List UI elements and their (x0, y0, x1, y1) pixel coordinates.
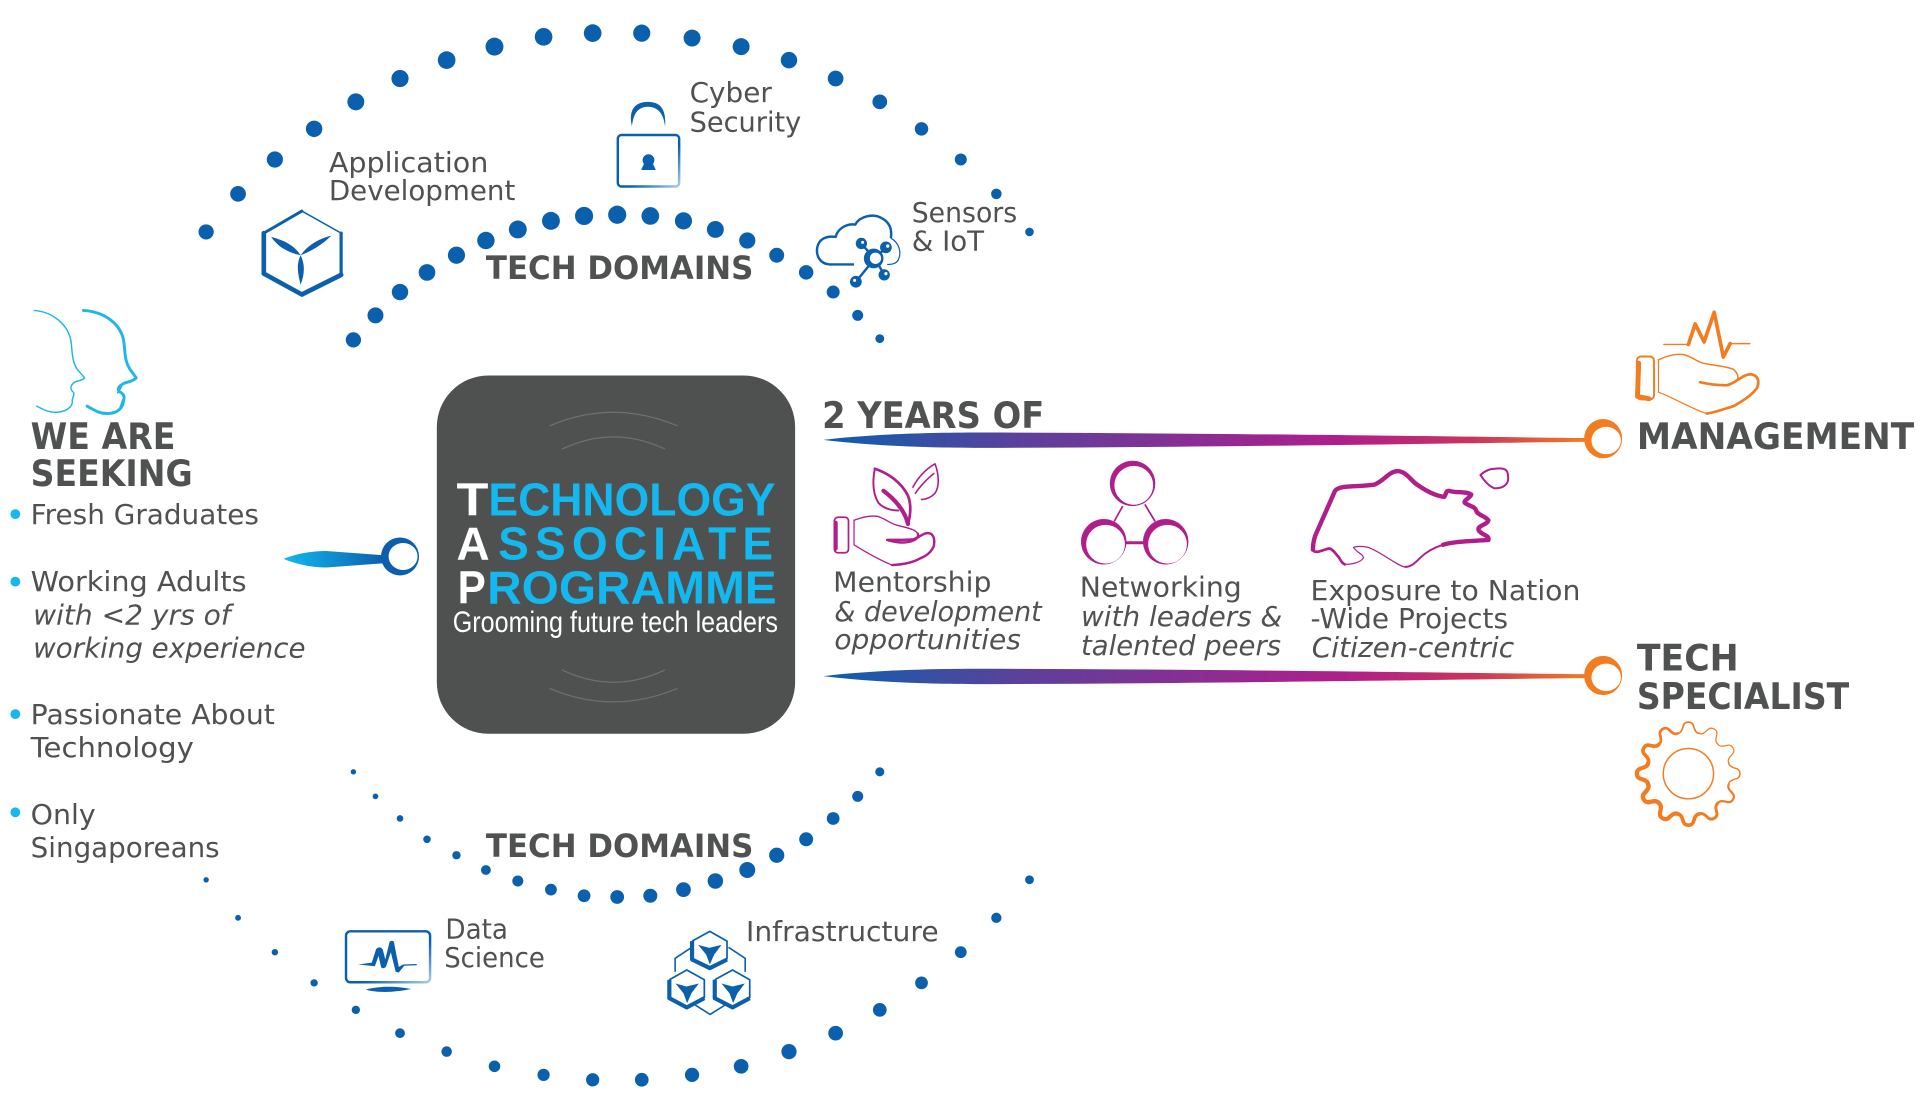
label: mentorship: Mentorship (833, 565, 991, 598)
label: mentorship: & development (834, 595, 1043, 628)
icon: singapore map (1313, 468, 1508, 567)
icon: gear (1637, 722, 1740, 825)
heading: tech specialist: TECH (1637, 637, 1739, 680)
label: exposure: -Wide Projects (1310, 602, 1508, 635)
panel: programme badge: A (456, 518, 490, 570)
dotted arc: bottom inner (351, 767, 884, 904)
panel: programme badge: ROGRAMME (487, 562, 777, 614)
label: data science (444, 913, 545, 974)
label: cyber security (690, 76, 801, 138)
list: candidate criteria: Singaporeans (31, 831, 220, 864)
label: application development: Development (329, 174, 516, 207)
heading: tech specialist (1637, 637, 1849, 718)
list: candidate criteria: Fresh Graduates (31, 498, 259, 531)
list: candidate criteria (10, 498, 306, 864)
heading: tech specialist: SPECIALIST (1637, 675, 1849, 718)
decorative arcs (550, 412, 677, 702)
list: candidate criteria: Passionate About (31, 698, 275, 731)
arrow: candidates into programme (283, 537, 419, 575)
heading: we are seeking: SEEKING (31, 452, 193, 495)
icon: plant in hand (834, 464, 938, 565)
label: networking (1080, 570, 1282, 662)
label: sensors and iot: Sensors (912, 196, 1017, 229)
icon: cloud network (817, 216, 900, 286)
label: data science: Data (445, 913, 508, 946)
dotted arc: bottom outer (203, 875, 1034, 1087)
heading: 2 years of: 2 YEARS OF (822, 394, 1044, 437)
node: management ring (1584, 419, 1622, 458)
label: sensors and iot (912, 196, 1017, 257)
heading: we are seeking: WE ARE (31, 415, 175, 458)
icon: three hexagons (669, 931, 750, 1014)
dotted arc: top outer (199, 24, 1034, 240)
label: infrastructure: Infrastructure (746, 915, 939, 948)
panel: programme badge: Grooming future tech leaders (453, 606, 778, 639)
arrow: track to management (823, 419, 1622, 458)
list: candidate criteria: Technology (30, 731, 194, 764)
icon: network triangle (1081, 461, 1188, 564)
list: candidate criteria: Only (31, 798, 96, 831)
label: application development (329, 146, 516, 207)
label: data science: Science (444, 941, 545, 974)
icon: two faces (34, 310, 136, 414)
panel: programme badge: ECHNOLOGY (488, 473, 775, 525)
dotted arc: top inner (346, 206, 884, 348)
label: exposure: Exposure to Nation (1310, 574, 1580, 607)
heading: we are seeking (31, 415, 193, 495)
heading: top tech domains: TECH DOMAINS (486, 249, 753, 287)
label: mentorship (833, 565, 1043, 656)
label: networking: talented peers (1081, 629, 1281, 662)
icon: hand with pulse (1637, 312, 1758, 414)
list: candidate criteria: Working Adults (31, 565, 247, 598)
icon: padlock (618, 102, 679, 187)
list: candidate criteria: working experience (33, 632, 306, 665)
label: cyber security: Security (690, 105, 801, 138)
label: application development: Application (329, 146, 488, 179)
heading: bottom tech domains: TECH DOMAINS (486, 827, 753, 865)
bullets (10, 509, 20, 817)
label: mentorship: opportunities (834, 623, 1021, 656)
label: networking: Networking (1080, 570, 1242, 603)
arrow: track to tech specialist (823, 656, 1622, 695)
list: candidate criteria: with <2 yrs of (33, 599, 235, 632)
icon: monitor with pulse (346, 931, 430, 992)
label: cyber security: Cyber (690, 76, 772, 109)
label: networking: with leaders & (1081, 600, 1282, 633)
label: exposure (1310, 574, 1580, 664)
panel: programme badge: SSOCIATE (498, 518, 773, 570)
label: sensors and iot: & IoT (912, 224, 984, 257)
label: exposure: Citizen-centric (1312, 631, 1514, 664)
panel: programme badge: P (458, 562, 486, 614)
node: specialist ring (1584, 656, 1622, 695)
icon: hexagon with turbine (264, 211, 341, 294)
panel: programme badge: T (456, 473, 488, 525)
panel: programme badge (437, 375, 795, 734)
